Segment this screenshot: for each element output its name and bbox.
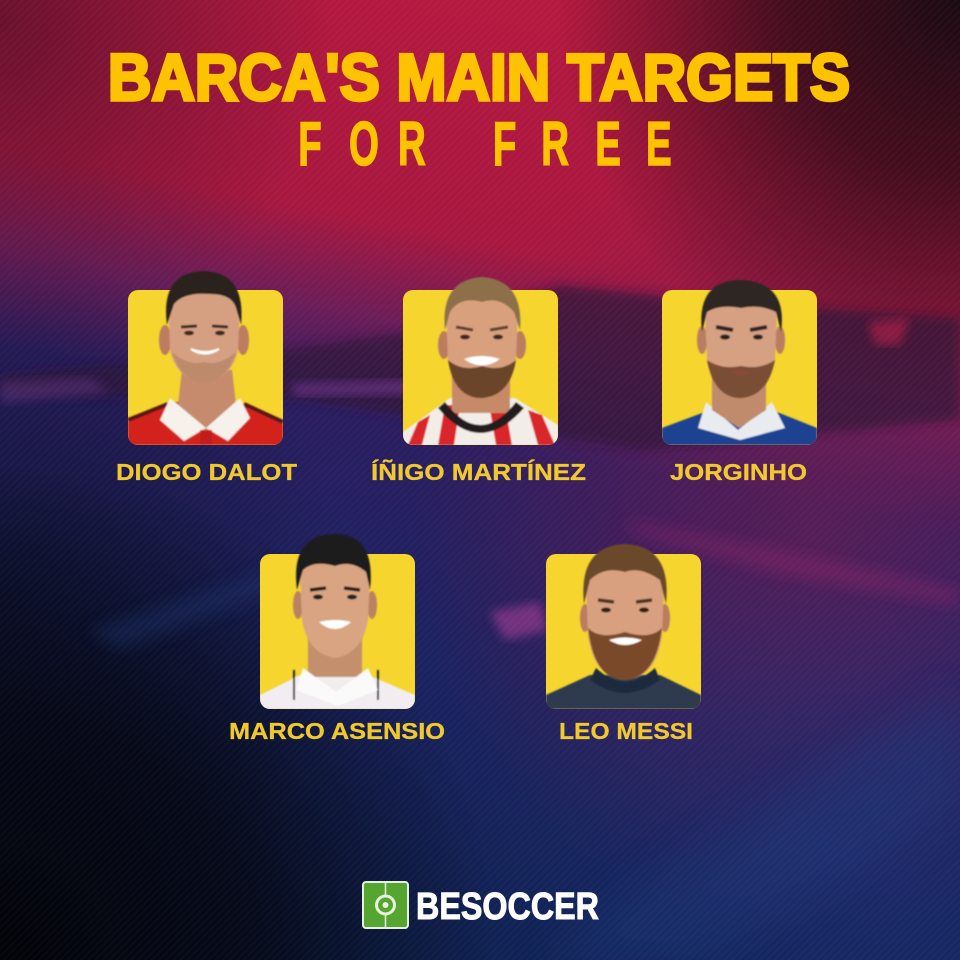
name: Marco Asensio: MARCO ASENSIO [229,718,445,744]
player card: Marco Asensio [260,534,415,709]
icon: pitch [363,882,408,928]
name: Iñigo Martínez: ÍÑIGO MARTÍNEZ [371,458,586,485]
heading: main title: BARCA'S MAIN TARGETS [108,40,850,114]
player card: Jorginho [662,280,817,445]
logo: BeSoccer [363,882,599,928]
player card: Diogo Dalot [128,271,283,445]
name: Leo Messi: LEO MESSI [559,718,693,744]
name: Jorginho: JORGINHO [670,459,807,485]
player card: Leo Messi [546,544,701,709]
name: Diogo Dalot: DIOGO DALOT [116,459,297,485]
heading: subtitle: FOR FREE [298,109,672,178]
wordmark: BESOCCER [416,886,599,928]
player card: Iñigo Martínez [403,277,558,445]
